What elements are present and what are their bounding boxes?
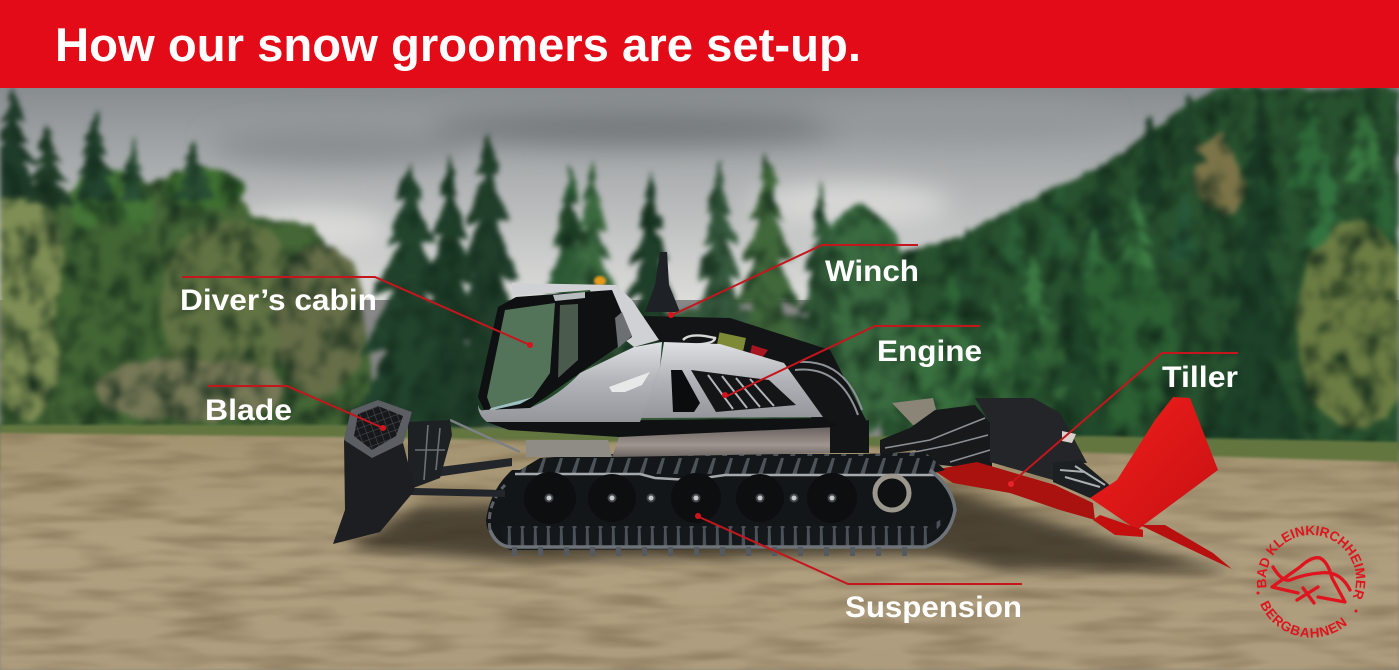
- callout: Engine: Engine: [877, 335, 982, 368]
- forest: central conifers: [345, 130, 910, 440]
- callout: Engine: [722, 326, 982, 398]
- snow groomer: [333, 252, 1232, 569]
- engine bay: [644, 252, 869, 445]
- blade: [333, 400, 520, 544]
- idler: [875, 476, 909, 510]
- callout: Diver's cabin: [180, 277, 533, 348]
- cabin: [478, 283, 662, 422]
- winch tower: [645, 252, 680, 312]
- wheel hubs: [546, 494, 836, 502]
- callout: Winch: [668, 245, 919, 318]
- track: [486, 452, 955, 552]
- machine shadow: [345, 490, 1235, 572]
- grass strip: [0, 425, 1399, 470]
- chassis: [487, 418, 869, 457]
- title: How our snow groomers are set-up.: [55, 18, 861, 71]
- logo: Bad Kleinkirchheimer Bergbahnen: [1256, 526, 1366, 638]
- tiller: [880, 397, 1232, 569]
- header band: [0, 0, 1399, 88]
- callout: Suspension: Suspension: [845, 591, 1022, 624]
- logo: Bad Kleinkirchheimer Bergbahnen: BERGBAHNEN: [1260, 600, 1347, 638]
- road wheels: [524, 472, 857, 524]
- forest: left side: [0, 88, 380, 432]
- callout: Diver's cabin: Diver’s cabin: [180, 284, 377, 317]
- callout: Blade: [205, 386, 386, 431]
- sky: [0, 80, 1399, 300]
- callout: Tiller: Tiller: [1162, 361, 1238, 394]
- callout: Suspension: [695, 513, 1022, 624]
- callout: Tiller: [1008, 353, 1238, 487]
- callout: Blade: Blade: [205, 394, 292, 427]
- forest: right hillside: [875, 88, 1399, 450]
- logo: Bad Kleinkirchheimer Bergbahnen: BAD KLEINKIRCHHEIMER: [1256, 526, 1366, 600]
- beacon: [594, 276, 606, 286]
- engine cover: [641, 342, 823, 418]
- callout: Winch: Winch: [825, 255, 919, 288]
- ground: [0, 433, 1399, 670]
